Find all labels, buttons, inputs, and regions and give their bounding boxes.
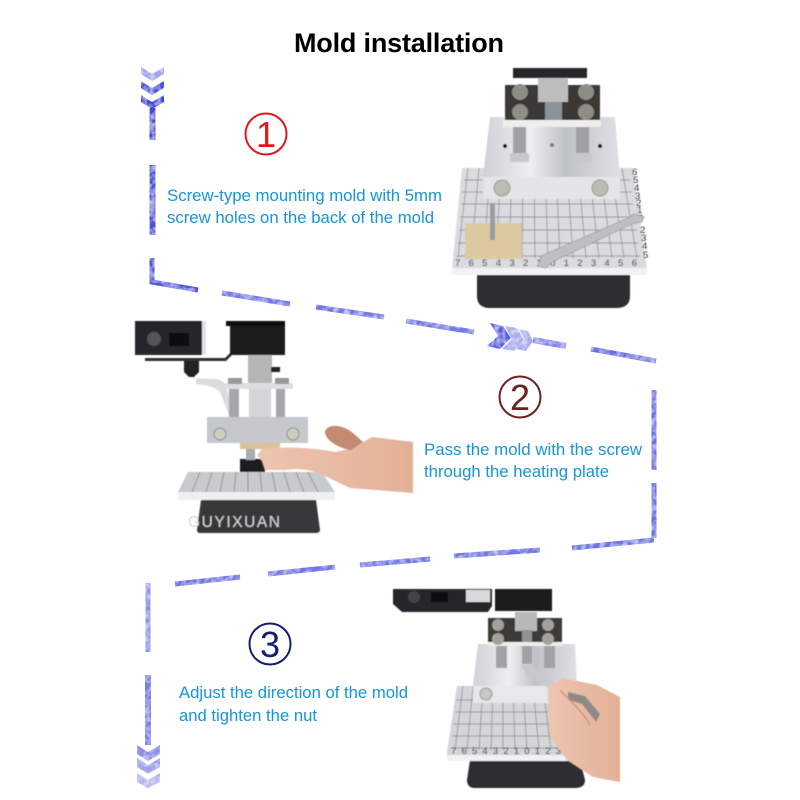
arrow: middle — [487, 323, 566, 351]
plate scale numbers: 3 — [635, 191, 640, 202]
wrench end held in fingers — [568, 692, 600, 722]
title: Mold installation — [294, 28, 504, 58]
photo: step 2 hand under press — [135, 321, 413, 533]
aluminium block — [207, 417, 308, 443]
step 3 text: and tighten the nut — [179, 706, 317, 725]
stem — [248, 355, 272, 383]
cable gland and cable — [184, 361, 199, 377]
plate scale numbers — [455, 167, 648, 269]
path segment: left lower — [146, 583, 150, 652]
plate scale numbers: 4 — [634, 183, 639, 194]
bracket opening — [466, 590, 490, 602]
aluminium block top — [473, 644, 577, 686]
plate scale numbers: 2 — [640, 225, 645, 236]
step 3 text — [179, 683, 408, 725]
base casting — [197, 500, 320, 533]
aluminium block front — [473, 686, 600, 703]
heating stem — [538, 78, 568, 102]
path segments: upper diagonal — [222, 293, 474, 332]
photo: step 3 tightening nut — [393, 589, 620, 788]
plate scale numbers: 5 — [633, 175, 638, 186]
step 1 number: 1 — [256, 114, 276, 155]
grid plate — [178, 472, 335, 500]
path segment: corner top left — [152, 258, 198, 290]
block holes — [214, 428, 299, 440]
black support under block — [240, 459, 265, 472]
plate scale numbers: 3 — [641, 233, 646, 244]
press head — [495, 589, 552, 611]
step 2 number: 2 — [510, 377, 530, 418]
base casting — [467, 760, 585, 788]
plate scale numbers: 2 — [636, 198, 641, 209]
dashed arrow path — [137, 67, 656, 788]
control knob — [408, 591, 420, 603]
bracket arm — [145, 335, 232, 361]
step 2 text: Pass the mold with the screw — [424, 440, 643, 459]
wrench — [538, 214, 644, 268]
path segment: upper right with corner — [591, 349, 656, 361]
rocker switch — [169, 333, 189, 346]
upper plate with nuts — [488, 618, 562, 643]
plate scale numbers: 7 6 5 4 3 2 1 0 1 2 3 4 5 6 — [455, 258, 637, 269]
plate scale numbers: 5 — [643, 250, 648, 261]
arrow: top start — [141, 67, 164, 140]
step 1 number — [246, 114, 286, 155]
watermark: GUYIXUAN — [188, 514, 280, 531]
wood mold — [240, 443, 280, 449]
wood mold — [465, 223, 522, 259]
lower aluminium block front — [483, 177, 620, 199]
control box — [135, 321, 202, 355]
control knob — [147, 332, 161, 346]
step 3 number — [250, 624, 290, 665]
step 2 number — [500, 376, 540, 418]
step 1 text — [167, 186, 442, 227]
plate scale numbers: 4 — [642, 241, 647, 252]
arrow: bottom end — [137, 675, 160, 788]
plate scale numbers: 7 6 5 4 3 2 1 0 1 2 3 — [451, 746, 561, 757]
press head — [230, 321, 285, 355]
photo: step 1 press head over grid plate — [452, 68, 648, 308]
step 1 text: Screw-type mounting mold with 5mm — [167, 186, 442, 205]
mold screw — [490, 203, 495, 240]
block hole — [480, 688, 492, 700]
rocker switch — [431, 592, 448, 602]
plate scale numbers: 1 — [637, 205, 642, 216]
step 2 text: through the heating plate — [424, 462, 609, 481]
bolts — [496, 644, 555, 668]
path segment: left upper — [150, 165, 156, 235]
upper plate with nuts — [505, 85, 600, 121]
grid plate — [452, 168, 647, 275]
screws — [228, 378, 289, 419]
top plate — [223, 383, 293, 389]
plate scale numbers: 0 — [638, 213, 643, 224]
step 2 text — [424, 440, 643, 481]
plate scale numbers: 6 — [632, 167, 637, 178]
small holes — [503, 143, 602, 148]
base casting — [477, 275, 630, 308]
hand — [548, 678, 620, 782]
path segments: lower diagonal — [175, 540, 654, 584]
top black bar — [513, 68, 587, 78]
grid plate — [447, 686, 580, 760]
stem — [515, 612, 537, 631]
path segments: right vertical — [652, 390, 656, 538]
block screw holes — [494, 180, 608, 196]
mounting bolts — [510, 125, 592, 162]
thumb — [325, 426, 363, 450]
hand — [257, 437, 413, 493]
lower aluminium block top — [483, 117, 620, 177]
step 3 text: Adjust the direction of the mold — [179, 683, 408, 702]
step 1 text: screw holes on the back of the mold — [167, 208, 434, 227]
wrench — [520, 665, 556, 690]
control box — [393, 589, 492, 612]
finger shadow — [560, 690, 590, 725]
step 3 number: 3 — [260, 624, 280, 665]
